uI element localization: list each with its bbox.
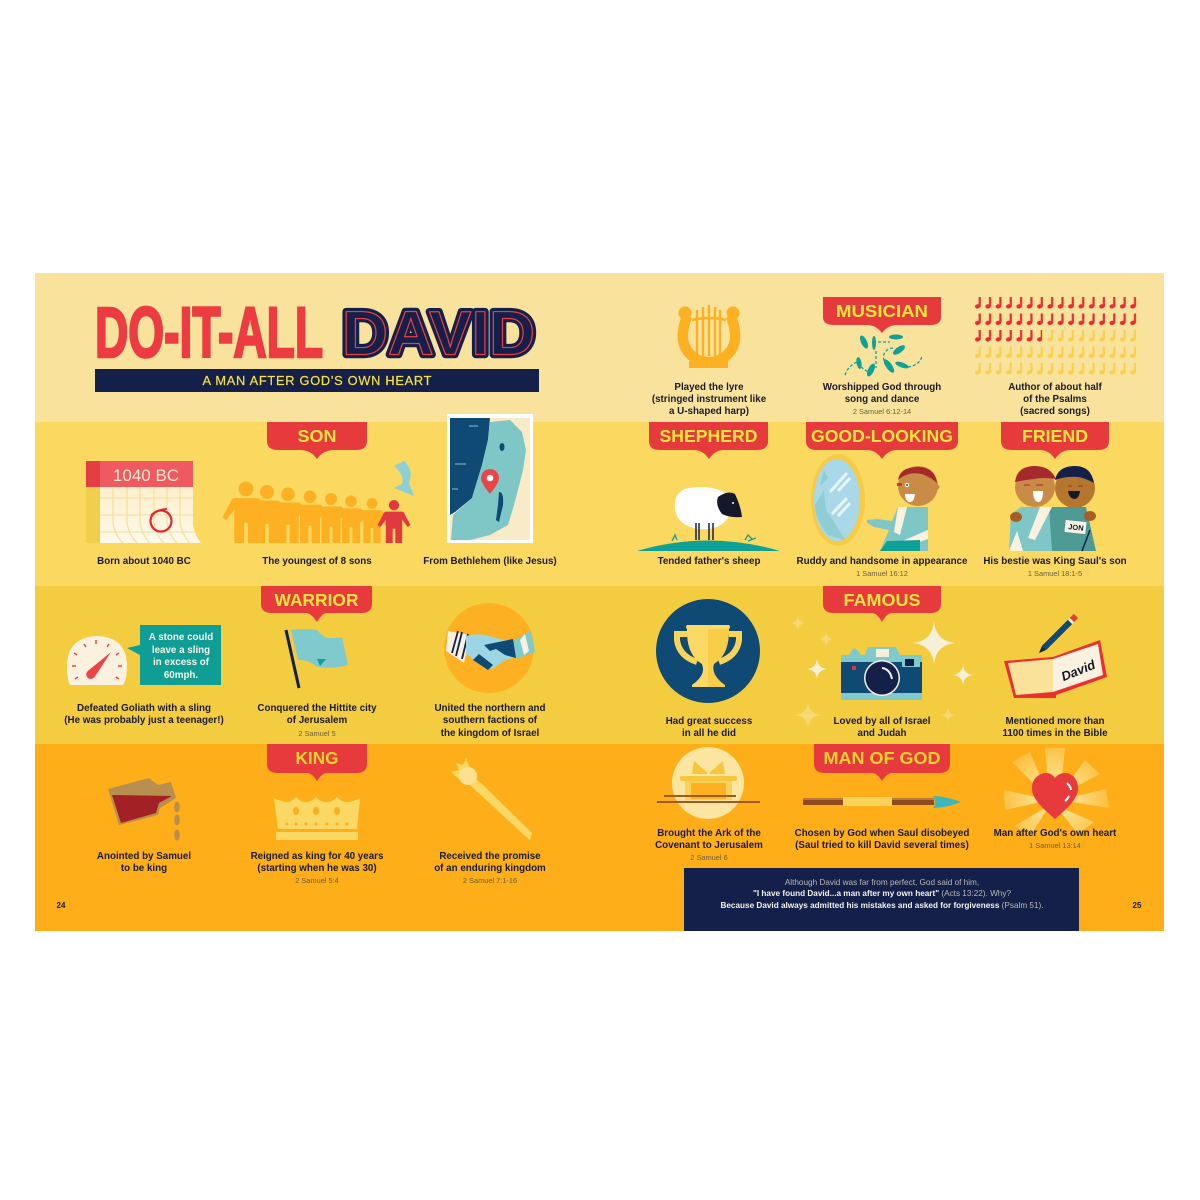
icon: anointing horn bbox=[108, 778, 180, 840]
text: reigned: 2 Samuel 5:4 bbox=[295, 876, 339, 885]
text: bestie: His bestie was King Saul's son bbox=[983, 556, 1127, 567]
callout: stone speed: leave a sling bbox=[152, 645, 210, 656]
icon: calendar bbox=[86, 461, 201, 543]
icon: pencil and book bbox=[1004, 616, 1107, 698]
subtitle bar: A MAN AFTER GOD'S OWN HEART bbox=[202, 373, 432, 388]
text: anointed: to be king bbox=[121, 863, 167, 874]
text: ruddy bbox=[797, 556, 968, 578]
icon: camera with sparkles bbox=[790, 615, 973, 728]
text: chosen: (Saul tried to kill David several times) bbox=[795, 840, 969, 851]
text: bethlehem: From Bethlehem (like Jesus) bbox=[423, 556, 557, 567]
text: chosen bbox=[795, 828, 969, 851]
text: promise bbox=[434, 851, 546, 885]
text: united bbox=[434, 703, 546, 739]
banner: king: KING bbox=[296, 748, 338, 768]
icon: mirror and David bbox=[811, 454, 940, 551]
icon: handshake bbox=[444, 603, 535, 693]
banner: man of god bbox=[814, 744, 950, 781]
text: mentioned: 1100 times in the Bible bbox=[1002, 728, 1108, 739]
icon: map bbox=[447, 414, 533, 543]
text: success: in all he did bbox=[682, 728, 736, 739]
text: ruddy: 1 Samuel 16:12 bbox=[856, 569, 908, 578]
banner: shepherd bbox=[649, 422, 768, 459]
text: bestie bbox=[983, 556, 1127, 578]
icon: calendar: 1040 BC bbox=[113, 466, 179, 485]
icon: pencil and book: David bbox=[1059, 656, 1098, 684]
banner: friend: FRIEND bbox=[1022, 426, 1088, 446]
banner: warrior: WARRIOR bbox=[274, 590, 359, 610]
banner: man of god: MAN OF GOD bbox=[824, 748, 940, 768]
text: promise: of an enduring kingdom bbox=[434, 863, 546, 874]
text: man after god's heart: Man after God's own heart bbox=[994, 828, 1117, 839]
text: loved: Loved by all of Israel bbox=[834, 716, 931, 727]
text: united: southern factions of bbox=[443, 715, 538, 726]
text: reigned: Reigned as king for 40 years bbox=[251, 851, 384, 862]
banner: famous: FAMOUS bbox=[844, 590, 920, 610]
text: born: Born about 1040 BC bbox=[97, 556, 191, 567]
page number 25: 25 bbox=[1133, 901, 1142, 910]
icon: curved arrow bbox=[394, 461, 414, 496]
text: mentioned bbox=[1002, 716, 1108, 739]
icon: sheep bbox=[637, 487, 780, 551]
text: played the lyre: (stringed instrument like bbox=[652, 394, 767, 405]
text: hittite: 2 Samuel 5 bbox=[298, 729, 336, 738]
text: played the lyre: Played the lyre bbox=[674, 382, 744, 393]
text: hittite bbox=[257, 703, 377, 738]
icon: David and Jonathan bbox=[1009, 466, 1096, 551]
text: worshipped bbox=[823, 382, 941, 416]
text: tended sheep: Tended father's sheep bbox=[658, 556, 760, 567]
callout: why David: Although David was far from perfect, God said of him, bbox=[785, 878, 979, 887]
icon: David and Jonathan: JON bbox=[1068, 522, 1084, 533]
icon: flag bbox=[286, 629, 348, 688]
banner: shepherd: SHEPHERD bbox=[660, 426, 758, 446]
banner: king bbox=[267, 744, 367, 781]
icon: ark of the covenant bbox=[657, 747, 760, 819]
text: goliath: Defeated Goliath with a sling bbox=[77, 703, 211, 714]
text: ruddy: Ruddy and handsome in appearance bbox=[797, 556, 968, 567]
text: loved: and Judah bbox=[858, 728, 907, 739]
text: worshipped: Worshipped God through bbox=[823, 382, 941, 393]
title: DO-IT-ALL bbox=[95, 294, 323, 373]
banner: friend bbox=[1001, 422, 1109, 459]
text: author of psalms: Author of about half bbox=[1008, 382, 1103, 393]
text: author of psalms bbox=[1008, 382, 1103, 417]
text: worshipped: song and dance bbox=[845, 394, 920, 405]
text: promise: 2 Samuel 7:1-16 bbox=[463, 876, 517, 885]
text: played the lyre: a U-shaped harp) bbox=[669, 406, 749, 417]
text: anointed bbox=[97, 851, 191, 874]
text: youngest: The youngest of 8 sons bbox=[262, 556, 372, 567]
text: author of psalms: of the Psalms bbox=[1023, 394, 1087, 405]
page background panel bbox=[35, 273, 1164, 931]
callout: stone speed bbox=[127, 625, 221, 685]
text: man after god's heart: 1 Samuel 13:14 bbox=[1029, 841, 1081, 850]
text: united: the kingdom of Israel bbox=[441, 728, 540, 739]
icon: eight brothers bbox=[223, 482, 410, 543]
subtitle bar bbox=[95, 369, 539, 392]
icon: crown bbox=[274, 797, 360, 840]
text: goliath: (He was probably just a teenager!) bbox=[64, 715, 224, 726]
banner: famous bbox=[823, 586, 941, 622]
banner: musician: MUSICIAN bbox=[836, 301, 928, 321]
icon: speed gauge bbox=[67, 636, 127, 685]
icon: scepter bbox=[451, 758, 532, 840]
icon: glowing heart bbox=[1004, 748, 1109, 836]
text: success: Had great success bbox=[666, 716, 753, 727]
text: loved bbox=[834, 716, 931, 739]
banner: musician bbox=[823, 297, 941, 333]
banner: son: SON bbox=[298, 426, 336, 446]
text: worshipped: 2 Samuel 6:12-14 bbox=[853, 407, 911, 416]
text: goliath bbox=[64, 703, 224, 726]
text: hittite: Conquered the Hittite city bbox=[257, 703, 377, 714]
banner: good-looking bbox=[806, 422, 958, 459]
callout: why David: "I have found David...a man after my own heart" (Acts 13:22). Why? bbox=[753, 889, 1011, 898]
text: reigned: (starting when he was 30) bbox=[257, 863, 377, 874]
text: ark: 2 Samuel 6 bbox=[690, 853, 728, 862]
icon: trophy bbox=[656, 599, 760, 703]
title: DAVID bbox=[342, 300, 535, 368]
icon: dance steps bbox=[845, 334, 922, 378]
text: success bbox=[666, 716, 753, 739]
banner: good-looking: GOOD-LOOKING bbox=[811, 426, 953, 446]
text: bestie: 1 Samuel 18:1-5 bbox=[1028, 569, 1082, 578]
text: mentioned: Mentioned more than bbox=[1005, 716, 1105, 727]
text: author of psalms: (sacred songs) bbox=[1020, 406, 1090, 417]
callout: stone speed: A stone could bbox=[149, 632, 213, 643]
title: DAVID bbox=[342, 300, 535, 368]
text: ark bbox=[655, 828, 763, 862]
chart: psalms notes bbox=[975, 297, 1136, 380]
banner: warrior bbox=[261, 586, 372, 622]
text: hittite: of Jerusalem bbox=[287, 715, 348, 726]
text: played the lyre bbox=[652, 382, 767, 417]
text: anointed: Anointed by Samuel bbox=[97, 851, 191, 862]
banner: son bbox=[267, 422, 367, 459]
text: promise: Received the promise bbox=[439, 851, 541, 862]
text: chosen: Chosen by God when Saul disobeyed bbox=[795, 828, 969, 839]
callout: why David: Because David always admitted his mistakes and asked for forgiveness (Psalm 51). bbox=[720, 901, 1044, 910]
text: ark: Brought the Ark of the bbox=[657, 828, 761, 839]
text: united: United the northern and bbox=[434, 703, 546, 714]
page number 24: 24 bbox=[57, 901, 66, 910]
callout: why David bbox=[684, 868, 1079, 931]
icon: lyre bbox=[678, 305, 740, 368]
icon: spear bbox=[803, 796, 961, 808]
callout: stone speed: in excess of bbox=[153, 657, 210, 668]
callout: stone speed: 60mph. bbox=[164, 670, 198, 681]
text: reigned bbox=[251, 851, 384, 885]
text: man after god's heart bbox=[994, 828, 1117, 850]
text: ark: Covenant to Jerusalem bbox=[655, 840, 763, 851]
